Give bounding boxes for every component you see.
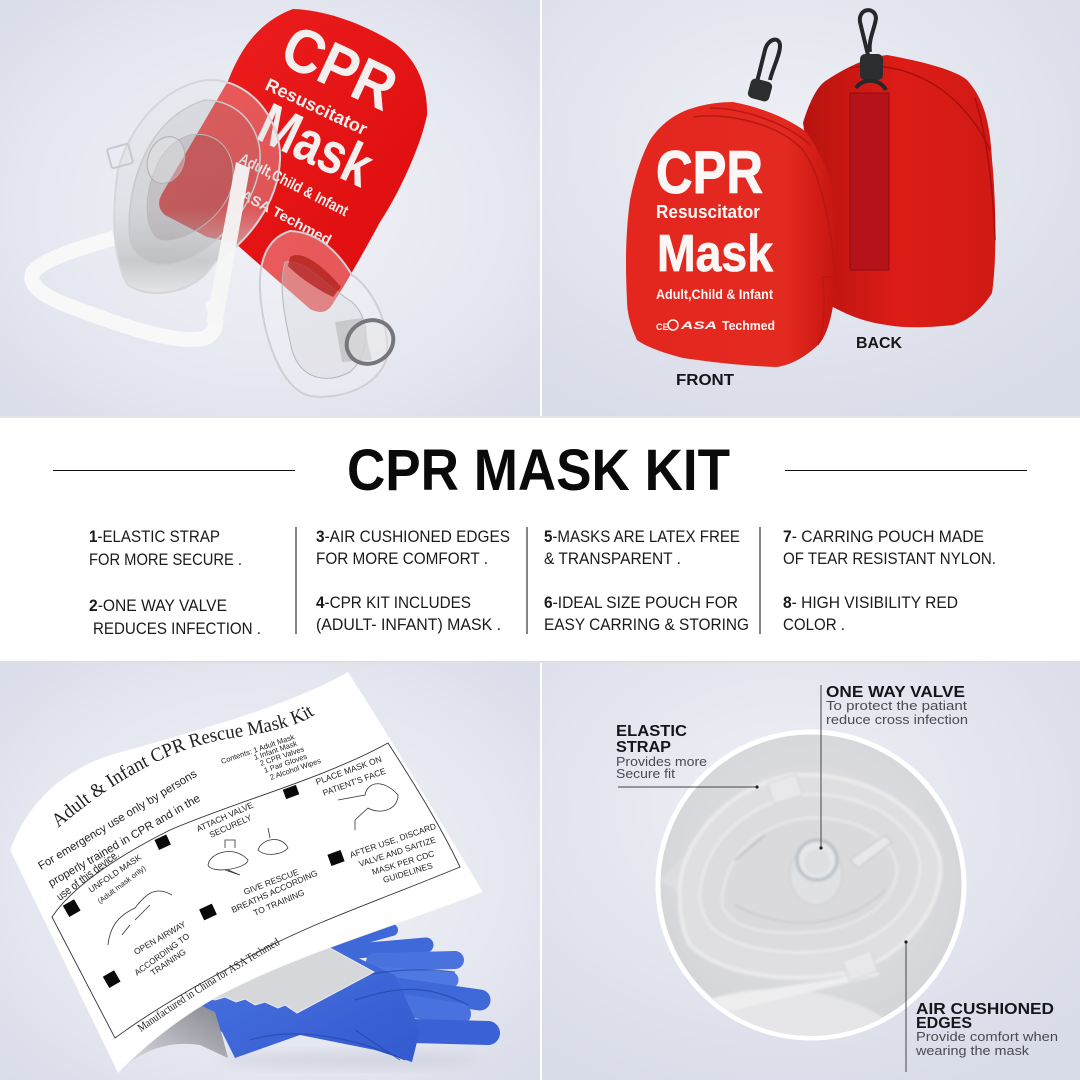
callout: elastic strap: Secure fit (616, 766, 675, 781)
front pouch print: CE (656, 322, 669, 332)
callout: elastic strap: ELASTIC (616, 723, 687, 740)
features column 1: 2-ONE WAY VALVE (89, 597, 227, 615)
sheet title: Adult & Infant CPR Rescue Mask Kit (54, 706, 315, 828)
front pouch print: Resuscitator (656, 201, 760, 222)
numbered steps: ACCORDING TO (132, 931, 192, 978)
numbered steps: AFTER USE, DISCARD (348, 821, 437, 860)
features column 3: EASY CARRING & STORING (544, 616, 749, 634)
step drawings (108, 784, 398, 945)
features column 4: 8- HIGH VISIBILITY RED (783, 594, 958, 612)
features column 4: 7- CARRING POUCH MADE (783, 528, 984, 546)
front pouch print: ASA (679, 320, 717, 332)
numbered steps: GIVE RESCUE (242, 867, 300, 897)
sheet contents: 2 CPR Valves (259, 744, 306, 768)
step number badges (63, 785, 345, 988)
features column 4 (783, 528, 996, 634)
features column 3: & TRANSPARENT . (544, 550, 681, 568)
features column 2: 4-CPR KIT INCLUDES (316, 594, 471, 612)
sheet warning: For emergency use only by persons (36, 768, 199, 873)
features column 1 (89, 528, 261, 638)
panel: masks and pouch photo (0, 0, 540, 416)
numbered steps: MASK PER CDC (371, 848, 435, 877)
front pouch print: Adult,Child & Infant (656, 287, 773, 302)
features column 1: REDUCES INFECTION . (93, 620, 261, 638)
features column 2: (ADULT- INFANT) MASK . (316, 616, 501, 634)
label: front: FRONT (676, 372, 734, 389)
magnified mask circle (658, 732, 964, 1060)
pouch print (236, 12, 407, 248)
features column 4: COLOR . (783, 616, 845, 634)
manufacturer line: Manufactured in China for ASA Techmed (136, 938, 280, 1032)
callout: elastic strap: STRAP (616, 739, 671, 756)
panel: instruction sheet and gloves (0, 663, 540, 1080)
red pouch (159, 9, 427, 312)
callout: air cushioned edges: Provide comfort when (916, 1029, 1058, 1044)
numbered steps: BREATHS ACCORDING (230, 868, 319, 915)
callout: air cushioned edges: EDGES (916, 1015, 972, 1032)
front pouch print (656, 139, 775, 333)
numbered steps: GUIDELINES (382, 860, 434, 885)
sheet contents: 2 Alcohol Wipes (269, 756, 322, 782)
instruction sheet (10, 672, 482, 1073)
numbered steps: TO TRAINING (252, 887, 306, 918)
adult mask and strap (32, 80, 280, 339)
back strap (850, 93, 889, 270)
pouch print: Mask (249, 91, 383, 200)
pouch print: Adult,Child & Infant (236, 150, 351, 220)
pouch print: ASA Techmed (239, 187, 334, 248)
features column 3: 5-MASKS ARE LATEX FREE (544, 528, 740, 546)
wipes (205, 947, 374, 1013)
numbered steps: PATIENT'S FACE (321, 766, 387, 798)
numbered steps: OPEN AIRWAY (132, 919, 188, 957)
label: back: BACK (856, 335, 902, 352)
callout: air cushioned edges: wearing the mask (915, 1043, 1030, 1058)
features column 3: 6-IDEAL SIZE POUCH FOR (544, 594, 738, 612)
features column 3 (544, 528, 749, 634)
numbered steps: TRAINING (149, 947, 188, 978)
features column 1: 1-ELASTIC STRAP (89, 528, 220, 546)
front pouch (626, 40, 838, 367)
features column 2 (316, 528, 510, 634)
callout: one way valve: ONE WAY VALVE (826, 684, 965, 701)
numbered steps: SECURELY (208, 812, 253, 840)
numbered steps (87, 754, 437, 978)
infant mask (260, 231, 401, 397)
heading: CPR MASK KIT (347, 438, 730, 503)
callout: one way valve: To protect the patiant (826, 698, 967, 713)
pouch print: Resuscitator (262, 74, 370, 139)
front pouch print: Mask (657, 225, 773, 283)
panel: front and back carrying pouch (542, 0, 1080, 416)
panel: mask close-up with callouts (542, 663, 1080, 1080)
callout: one way valve: reduce cross infection (826, 712, 968, 727)
sheet contents: 1 Infant Mask (253, 739, 298, 762)
numbered steps: (Adult mask only) (96, 863, 148, 906)
callout: air cushioned edges: AIR CUSHIONED (916, 1001, 1054, 1018)
numbered steps: VALVE AND SAITIZE (358, 834, 437, 869)
features column 1: FOR MORE SECURE . (89, 551, 242, 569)
pouch print: CPR (271, 12, 407, 125)
features column 2: 3-AIR CUSHIONED EDGES (316, 528, 510, 546)
features column 4: OF TEAR RESISTANT NYLON. (783, 550, 996, 568)
sheet contents: 1 Pair Gloves (263, 752, 308, 775)
clip hook (856, 10, 886, 90)
sheet contents: Contents: 1 Adult Mask (220, 732, 296, 766)
callout: elastic strap: Provides more (616, 754, 707, 769)
front pouch print: CPR (656, 139, 763, 206)
panel: feature band (0, 416, 1080, 663)
blue gloves (198, 930, 488, 1062)
sheet contents (220, 732, 322, 782)
numbered steps: UNFOLD MASK (87, 852, 143, 895)
back pouch (803, 10, 995, 327)
front pouch print: Techmed (722, 318, 775, 333)
numbered steps: PLACE MASK ON (314, 754, 383, 787)
sheet warning: use of this device. (55, 849, 122, 903)
features column 2: FOR MORE COMFORT . (316, 550, 488, 568)
callout: one way valve (819, 684, 968, 850)
sheet warning: properly trained in CPR and in the (46, 793, 203, 890)
callout: elastic strap (616, 723, 759, 789)
clip hook (747, 40, 780, 103)
numbered steps: ATTACH VALVE (195, 800, 255, 834)
callout: air cushioned edges (904, 940, 1058, 1072)
